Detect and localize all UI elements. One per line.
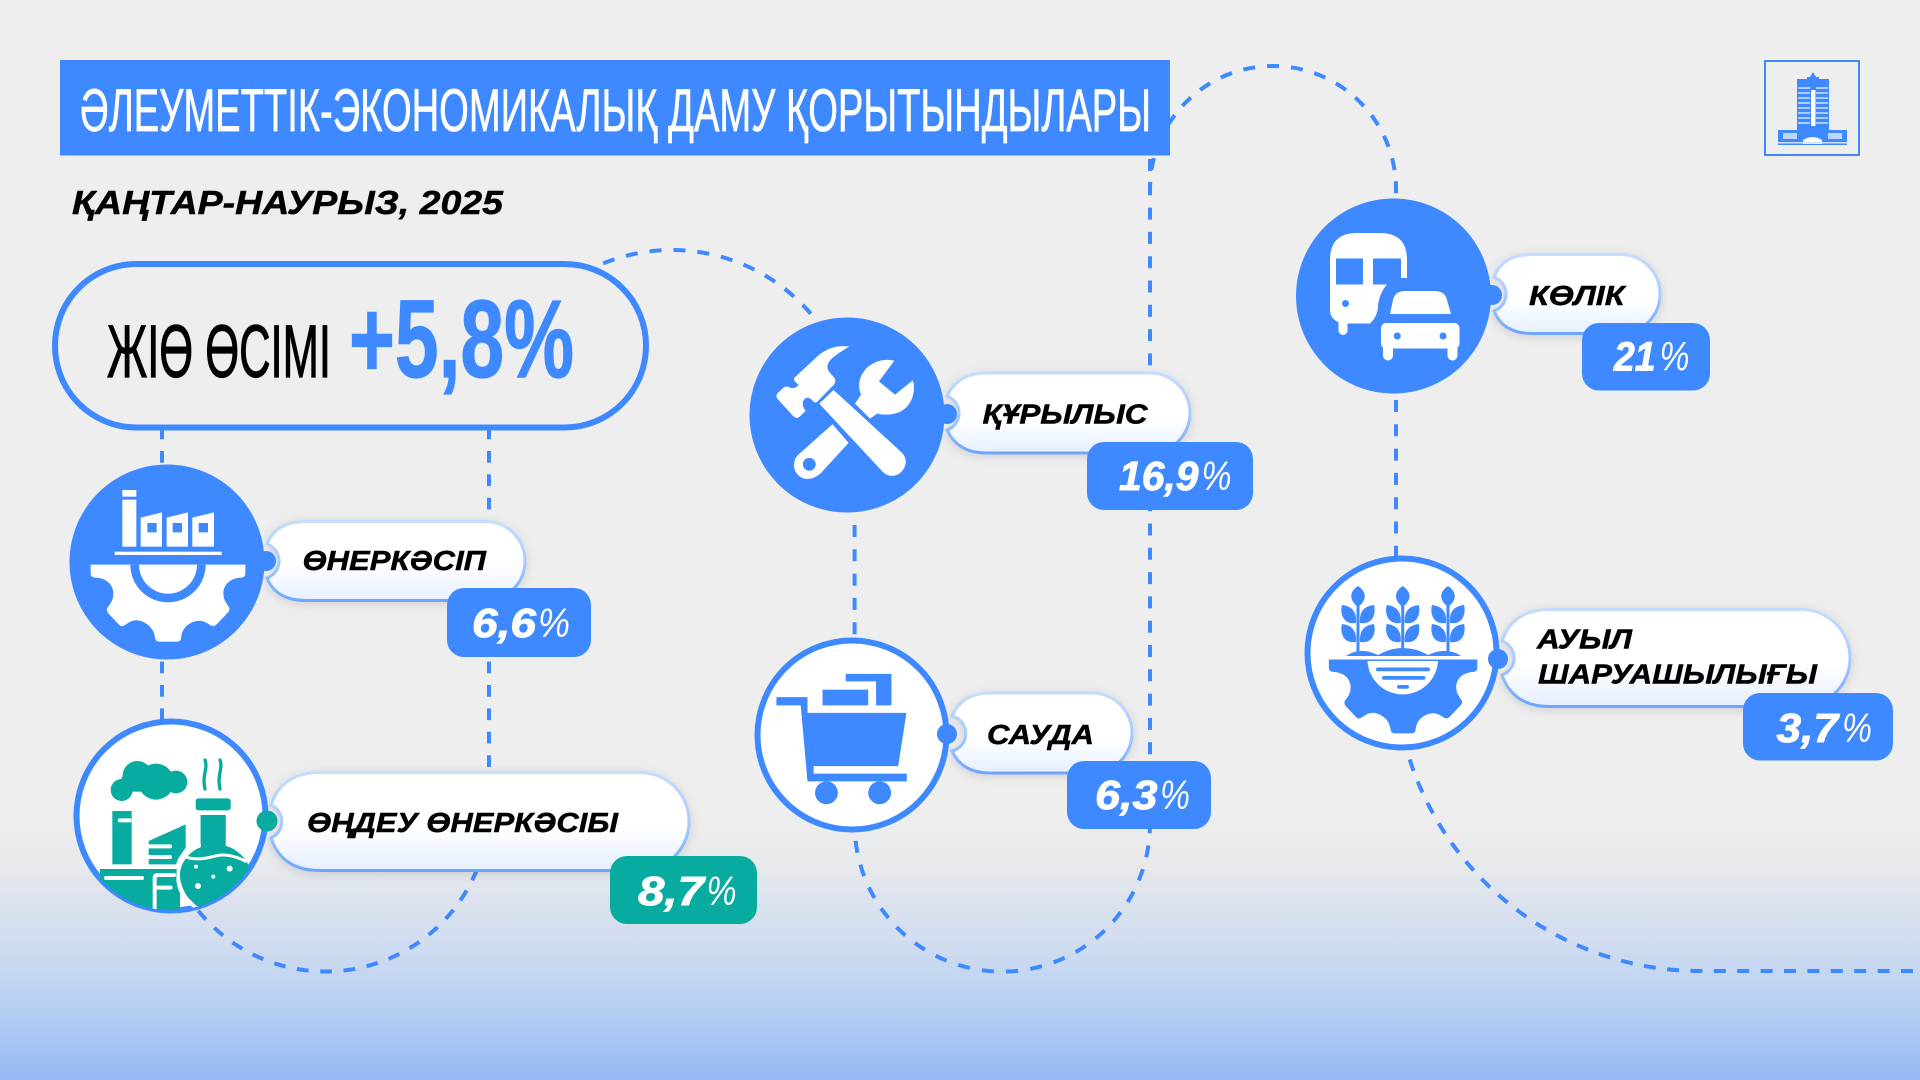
icon: factory on gear	[70, 464, 276, 660]
label pill: manufacturing	[271, 772, 689, 870]
icon: shopping cart	[758, 640, 957, 830]
value badge: industry: 6,6	[472, 600, 537, 646]
value badge: industry: %	[538, 600, 570, 646]
value badge: trade	[1067, 761, 1211, 829]
panel: trade	[758, 640, 1211, 830]
label pill: transport: КӨЛІК	[1529, 280, 1627, 311]
icon: hammer and wrench	[750, 318, 957, 512]
panel: construction	[750, 318, 1253, 512]
icon: factory and flask	[76, 722, 278, 916]
title banner	[60, 60, 1170, 156]
panel: agriculture	[1308, 558, 1893, 760]
label pill: agriculture	[1502, 610, 1850, 706]
value badge: construction: 16,9	[1119, 453, 1199, 499]
value badge: manufacturing	[610, 856, 757, 924]
GDP growth pill	[55, 264, 646, 428]
value badge: trade: 6,3	[1095, 772, 1158, 818]
label pill: manufacturing: ӨҢДЕУ ӨНЕРКӘСІБІ	[307, 807, 619, 838]
label pill: agriculture: АУЫЛ	[1536, 624, 1633, 654]
logo: government building	[1765, 61, 1859, 155]
value badge: transport: %	[1660, 334, 1690, 380]
GDP growth value: +5,8%	[349, 278, 574, 401]
label pill: trade	[952, 693, 1132, 773]
value badge: industry	[447, 588, 591, 657]
icon: plants on gear	[1308, 558, 1508, 748]
label pill: construction: ҚҰРЫЛЫС	[982, 398, 1148, 430]
GDP growth label: ЖІӨ ӨСІМІ	[107, 310, 331, 393]
value badge: manufacturing: 8,7	[638, 868, 707, 914]
panel: industry	[70, 464, 591, 660]
value badge: trade: %	[1160, 772, 1190, 818]
value badge: transport	[1582, 323, 1710, 390]
subtitle: period: ҚАҢТАР-НАУРЫЗ, 2025	[72, 184, 504, 221]
value badge: construction	[1087, 442, 1253, 510]
panel: transport	[1296, 198, 1710, 394]
value badge: agriculture	[1743, 693, 1893, 760]
label pill: industry	[267, 522, 525, 600]
icon: bus and car	[1296, 198, 1502, 394]
label pill: industry: ӨНЕРКӘСІП	[302, 545, 487, 576]
value badge: transport: 21	[1613, 334, 1656, 380]
value badge: manufacturing: %	[706, 868, 736, 914]
title banner: ӘЛЕУМЕТТІК-ЭКОНОМИКАЛЫҚ ДАМУ ҚОРЫТЫНДЫЛАРЫ	[80, 77, 1151, 144]
value badge: construction: %	[1202, 453, 1232, 499]
label pill: transport	[1494, 254, 1660, 334]
label pill: trade: САУДА	[987, 719, 1094, 750]
value badge: agriculture: %	[1842, 705, 1872, 751]
label pill: agriculture: ШАРУАШЫЛЫҒЫ	[1538, 658, 1818, 690]
value badge: agriculture: 3,7	[1776, 705, 1840, 751]
label pill: construction	[947, 373, 1190, 453]
dashed connector route	[162, 66, 1913, 972]
panel: manufacturing	[76, 722, 757, 924]
